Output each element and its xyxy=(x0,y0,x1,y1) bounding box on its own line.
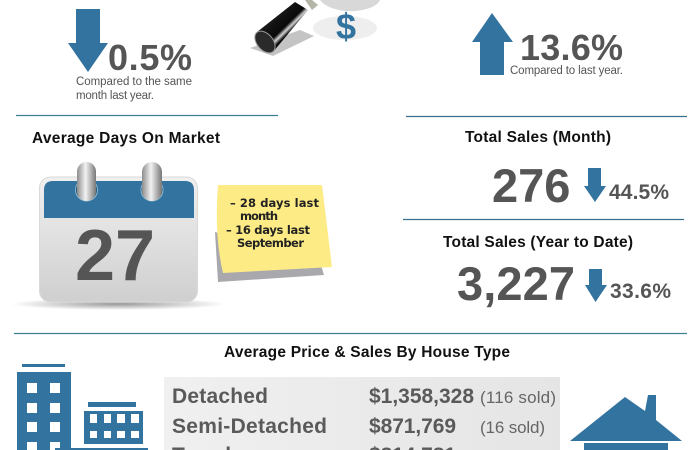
icon: up arrow xyxy=(472,13,513,75)
text: comparison note: Compared to the same xyxy=(76,76,192,88)
text: comparison note: month last year. xyxy=(76,90,154,102)
heading: average days on market: Average Days On Market xyxy=(32,130,220,147)
icon: small down arrow xyxy=(585,269,607,302)
icon: calendar showing 27: 27 xyxy=(75,216,155,296)
row: semi-detached: $871,769 xyxy=(369,415,456,438)
panel: total sales year to date xyxy=(443,234,671,310)
row: detached: Detached xyxy=(172,385,268,408)
icon: small down arrow xyxy=(584,168,606,202)
heading: average price and sales by house type: Average Price & Sales By House Type xyxy=(224,344,510,361)
icon: magnifying glass over dollar sign: $ xyxy=(336,6,356,47)
heading: total sales month: Total Sales (Month) xyxy=(465,129,611,146)
row: townhouse xyxy=(172,444,545,450)
callout: sticky note: month xyxy=(240,209,278,223)
callout: sticky note: – 28 days last xyxy=(230,196,320,210)
panel: total sales month xyxy=(465,129,669,212)
panel: price table xyxy=(164,377,560,450)
icon: magnifying glass over dollar sign xyxy=(250,0,380,57)
stat: 33.6%: 33.6% xyxy=(610,280,671,303)
stat: 13.6%: 13.6% xyxy=(520,27,623,68)
icon: apartment buildings xyxy=(17,364,148,450)
row: semi-detached: Semi-Detached xyxy=(172,415,327,438)
panel: top left change stat xyxy=(68,9,192,102)
row: detached: $1,358,328 xyxy=(369,385,474,408)
row: semi-detached xyxy=(172,415,545,438)
row: detached: (116 sold) xyxy=(480,388,556,407)
callout: sticky note: – 16 days last xyxy=(226,223,310,237)
heading: total sales year to date: Total Sales (Year to Date) xyxy=(443,234,633,251)
stat: 0.5%: 0.5% xyxy=(108,37,192,78)
stat: 44.5%: 44.5% xyxy=(609,181,669,204)
text: comparison note: Compared to last year. xyxy=(510,65,623,77)
icon: calendar showing 27 xyxy=(10,162,226,310)
icon: house xyxy=(570,395,682,450)
callout: sticky note: September xyxy=(237,236,304,250)
stat: 3,227: 3,227 xyxy=(457,257,575,310)
stat: 276: 276 xyxy=(492,159,570,212)
panel: top right change stat xyxy=(472,13,623,77)
row: detached xyxy=(172,385,556,408)
callout: sticky note xyxy=(215,185,332,282)
icon: down arrow xyxy=(68,9,108,72)
row: semi-detached: (16 sold) xyxy=(480,418,545,437)
